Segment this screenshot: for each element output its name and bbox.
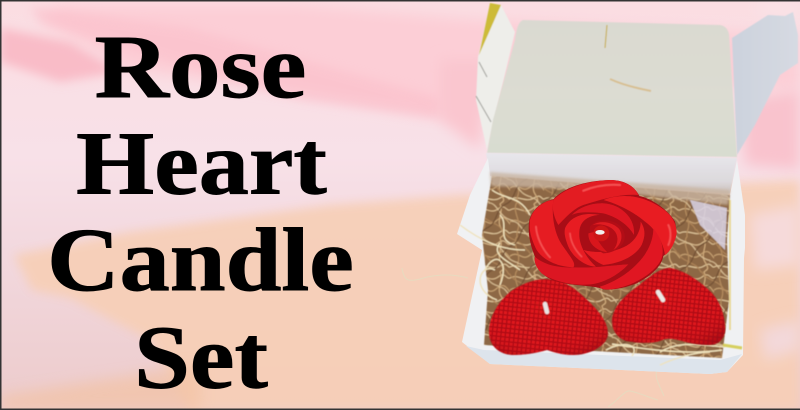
title (47, 17, 354, 407)
loose straw strands (402, 268, 664, 407)
title: Candle (47, 210, 354, 310)
gift box with candles (402, 3, 798, 407)
wick (545, 304, 547, 312)
box lid: left flap (476, 3, 515, 150)
wick (658, 292, 663, 300)
box lid: back panel (487, 20, 737, 157)
wick (595, 230, 605, 235)
box tray: outer walls (457, 158, 745, 374)
box lid: right flap (732, 12, 798, 155)
title: Set (134, 307, 268, 407)
title: Rose (95, 17, 306, 117)
title: Heart (76, 113, 327, 213)
petal: top (553, 180, 638, 225)
left heart candle (489, 279, 608, 355)
petal: inner lower (583, 222, 644, 265)
rose candle (529, 180, 677, 290)
straw filling (460, 172, 742, 365)
right heart candle (612, 268, 725, 345)
petal: inner top (572, 203, 634, 235)
box lid: inner fold wall (486, 153, 737, 194)
petal: lower right (600, 228, 663, 289)
petal: inner left (565, 214, 600, 267)
petal: left (530, 200, 574, 267)
highlights (536, 185, 670, 257)
box tray: front lip (466, 346, 742, 374)
petal: bottom (535, 257, 628, 285)
rose heart (590, 220, 625, 253)
petal: right (603, 196, 677, 255)
